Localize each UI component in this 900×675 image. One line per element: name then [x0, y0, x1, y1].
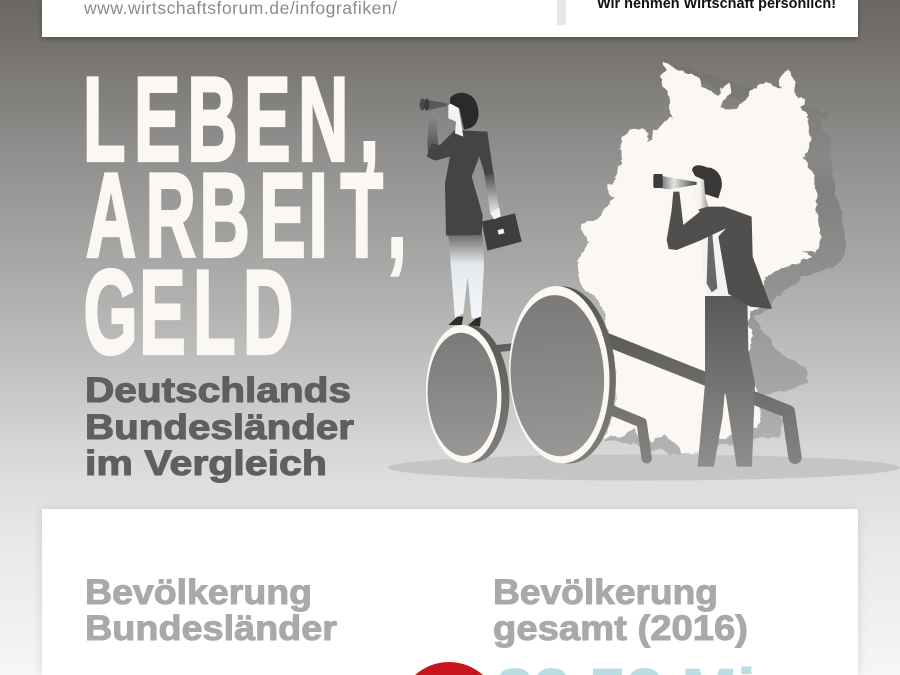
binoculars: [420, 98, 447, 111]
binoculars: [653, 174, 697, 189]
hand: [491, 207, 501, 219]
face and neck: [448, 100, 463, 137]
binocular frame bars: [497, 338, 795, 458]
jacket: [667, 192, 772, 309]
illustration: [420, 60, 845, 467]
briefcase: [482, 213, 522, 251]
face: [687, 177, 708, 209]
hair: [692, 165, 722, 198]
left lens: [424, 324, 512, 464]
heading: Bevölkerung Bundesländer: Bevölkerung: [85, 573, 312, 612]
subtitle: im Vergleich: [85, 444, 327, 483]
dress: [427, 130, 493, 236]
red circle icon: [415, 662, 483, 675]
heading: Bevölkerung gesamt: [493, 573, 748, 648]
content card: [42, 509, 858, 675]
right lens: [505, 284, 620, 466]
man with binoculars: [653, 165, 772, 467]
raised arm: [427, 113, 438, 157]
subtitle: [85, 371, 354, 483]
heading: Bevölkerung gesamt: Bevölkerung: [493, 573, 718, 612]
title: [83, 52, 407, 379]
heading: Bevölkerung Bundesländer: Bundesländer: [85, 609, 337, 648]
legs: [448, 235, 484, 318]
heading: Bevölkerung gesamt: gesamt (2016): [493, 609, 748, 648]
shoes: [448, 317, 481, 327]
ground shadow: [388, 454, 900, 480]
map shadow of Germany: [607, 62, 845, 455]
trousers: [698, 295, 755, 467]
heading: Bevölkerung Bundesländer: [85, 573, 337, 648]
map of Germany: [577, 60, 822, 453]
title: ARBEIT,: [86, 148, 407, 282]
arm with briefcase: [484, 172, 500, 215]
title: GELD: [84, 245, 293, 379]
hair: [450, 93, 478, 129]
subtitle: Deutschlands: [85, 371, 351, 410]
shirt: [697, 206, 730, 296]
header card: [42, 0, 858, 37]
title: LEBEN,: [83, 52, 379, 186]
subtitle: Bundesländer: [85, 408, 354, 447]
tie: [706, 213, 717, 292]
woman with binoculars: [420, 93, 522, 327]
